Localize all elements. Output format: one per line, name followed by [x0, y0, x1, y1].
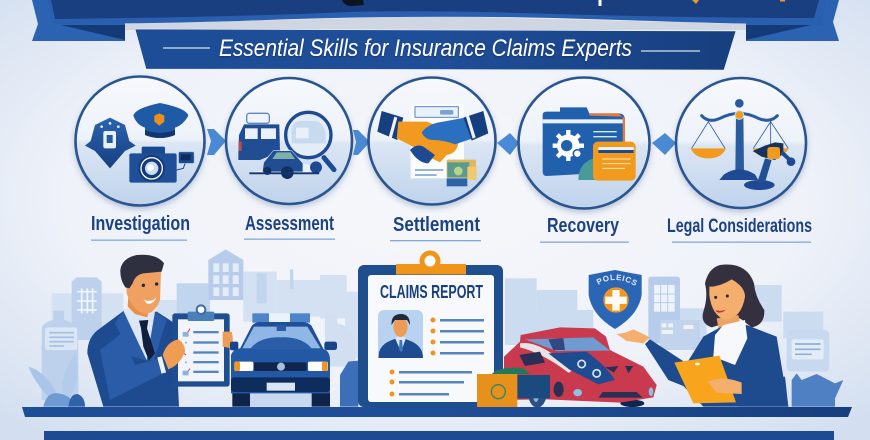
icon: investigation tools: [85, 103, 194, 183]
circle: recovery: [518, 78, 650, 208]
circle: legal considerations: [676, 78, 806, 208]
city skyline left: [42, 249, 358, 407]
label: Recovery: Recovery: [547, 215, 620, 237]
label: Assessment: Assessment: [245, 213, 334, 235]
claims report clipboard: [358, 250, 503, 407]
icon: scales and gavel: [691, 99, 795, 190]
label: Investigation: [91, 213, 190, 241]
circle: investigation: [76, 76, 204, 206]
shield badge: POLEICS: [588, 270, 642, 329]
report list: [390, 318, 484, 396]
canister: [340, 361, 358, 407]
subtitle text: Essential Skills for Insurance Claims Experts: [219, 35, 632, 62]
label: Settlement: [390, 214, 481, 241]
label: Legal Considerations: Legal Considerations: [667, 216, 812, 237]
label: Investigation: Investigation: [91, 213, 190, 235]
circle: settlement: [368, 78, 496, 204]
top title ribbon: [32, 0, 839, 41]
cash box: [477, 368, 550, 408]
icon: handshake over contract: [377, 104, 488, 186]
icon: car inspection: [238, 112, 334, 179]
arrow 3: [497, 133, 519, 155]
plant: [28, 353, 85, 407]
label: Recovery: [540, 215, 629, 243]
circle: assessment: [226, 78, 352, 204]
shelf bar: [22, 407, 852, 417]
arrow 1: [207, 129, 226, 155]
woman with clipboard: [617, 265, 788, 407]
scene left: city, plant, man and car: [28, 249, 358, 407]
man with checklist: [87, 255, 233, 407]
icon: folder and gear: [543, 107, 636, 181]
subtitle ribbon: [135, 29, 736, 70]
arrow 4: [652, 133, 676, 155]
arrow 2: [353, 130, 370, 155]
car front view: [230, 313, 337, 407]
claims report heading: CLAIMS REPORT: [380, 282, 483, 302]
title ribbon glyph remnants: [342, 0, 785, 6]
label: Settlement: Settlement: [393, 214, 480, 236]
avatar: [378, 310, 423, 358]
bottom ribbon: [44, 431, 834, 440]
city skyline right: [505, 277, 843, 407]
label: Assessment: [244, 213, 335, 240]
red car: [504, 327, 657, 408]
scene right: city, car, shield and woman: [477, 264, 844, 407]
shield badge: POLEICS: POLEICS: [596, 274, 637, 286]
